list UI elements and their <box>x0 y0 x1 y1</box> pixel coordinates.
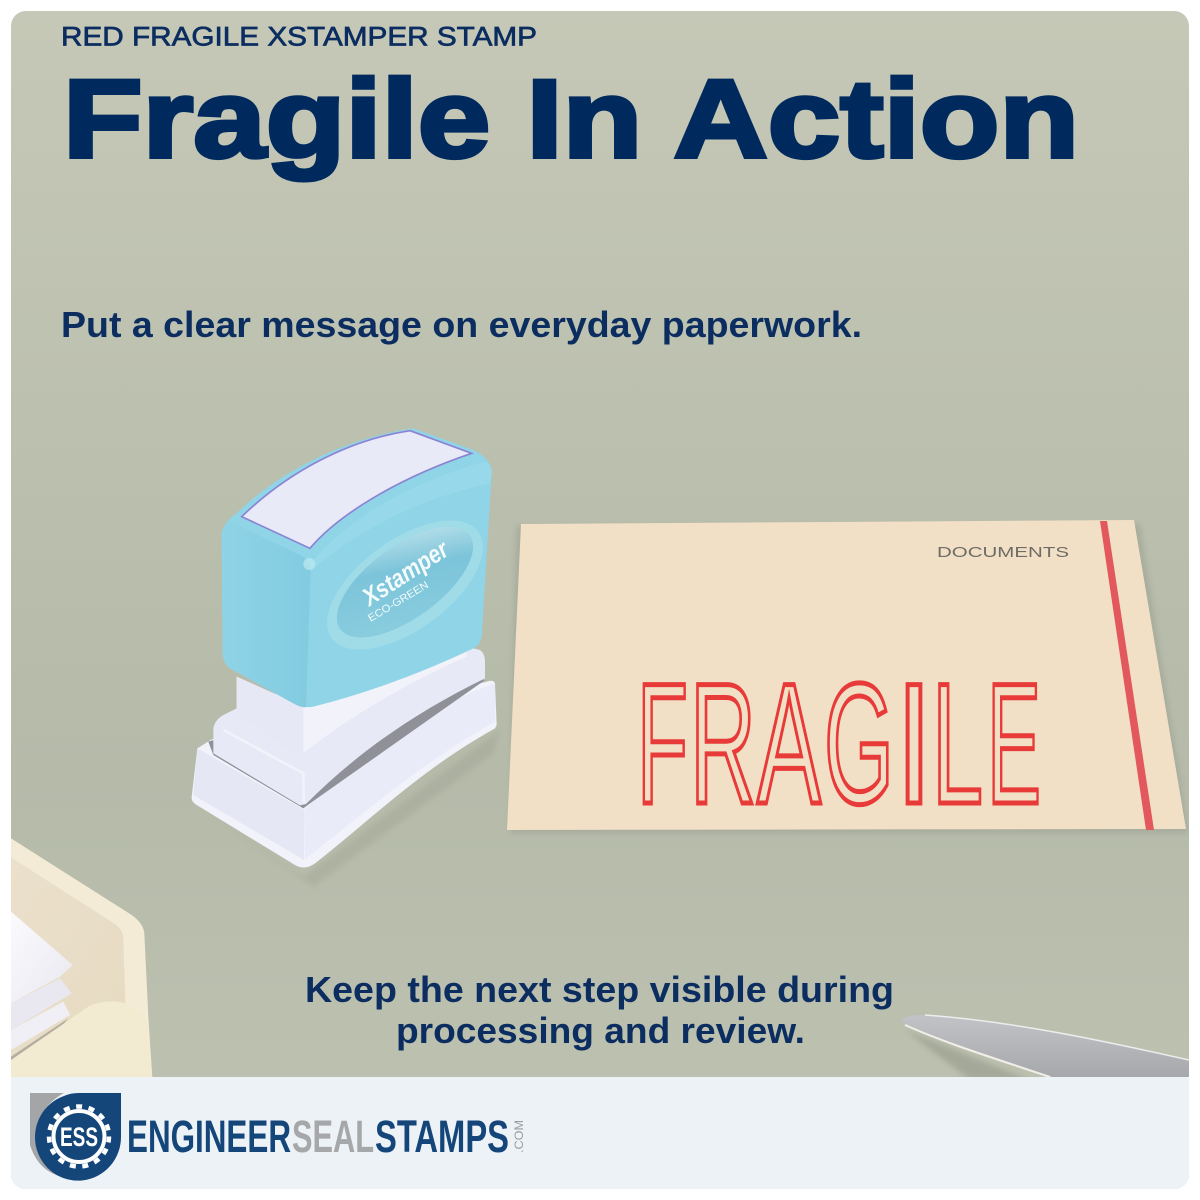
bottom caption: processing and review. <box>396 1010 805 1051</box>
logo: wordmark <box>127 1111 526 1162</box>
logo: wordmark: STAMPS <box>375 1111 509 1162</box>
column <box>236 652 466 752</box>
tagline: Put a clear message on everyday paperwork. <box>61 304 862 345</box>
stamped FRAGILE impression: F <box>637 648 688 840</box>
envelope <box>507 520 1188 833</box>
stamped FRAGILE impression: I <box>895 648 933 840</box>
stamped FRAGILE impression: A <box>757 648 821 840</box>
panel: photo background: E <box>987 648 1041 840</box>
stamp brand name: Xstamper <box>356 535 454 613</box>
papers <box>11 912 73 1063</box>
logo: wordmark: SEAL <box>292 1111 374 1162</box>
stamped FRAGILE impression <box>642 680 1039 808</box>
inner block <box>213 647 485 805</box>
logo: ESS gear badge <box>30 1093 121 1181</box>
bottom caption <box>305 969 894 1051</box>
stamp brand name: ECO-GREEN <box>366 579 431 625</box>
stamped FRAGILE impression: G <box>824 648 894 840</box>
desk tray with papers <box>11 838 152 1078</box>
stamp logo window <box>327 520 483 650</box>
blue body <box>222 428 492 707</box>
logo monogram: ESS <box>60 1122 98 1152</box>
stamped FRAGILE impression: L <box>932 648 983 840</box>
letter opener blade <box>902 1015 1189 1080</box>
top label <box>242 431 472 548</box>
stamp brand name <box>362 542 446 622</box>
logo: wordmark: ENGINEER <box>127 1111 291 1162</box>
stamped FRAGILE impression: R <box>690 648 756 840</box>
envelope label: DOCUMENTS <box>937 545 1069 561</box>
title: Fragile In Action <box>63 57 1079 181</box>
footer band <box>11 1077 1189 1189</box>
tray silhouette and lip <box>192 681 497 867</box>
stamp: Xstamper <box>192 428 505 887</box>
eyebrow heading: RED FRAGILE XSTAMPER STAMP <box>61 22 537 52</box>
logo: wordmark: .COM <box>512 1120 526 1153</box>
bottom caption: Keep the next step visible during <box>305 969 894 1010</box>
